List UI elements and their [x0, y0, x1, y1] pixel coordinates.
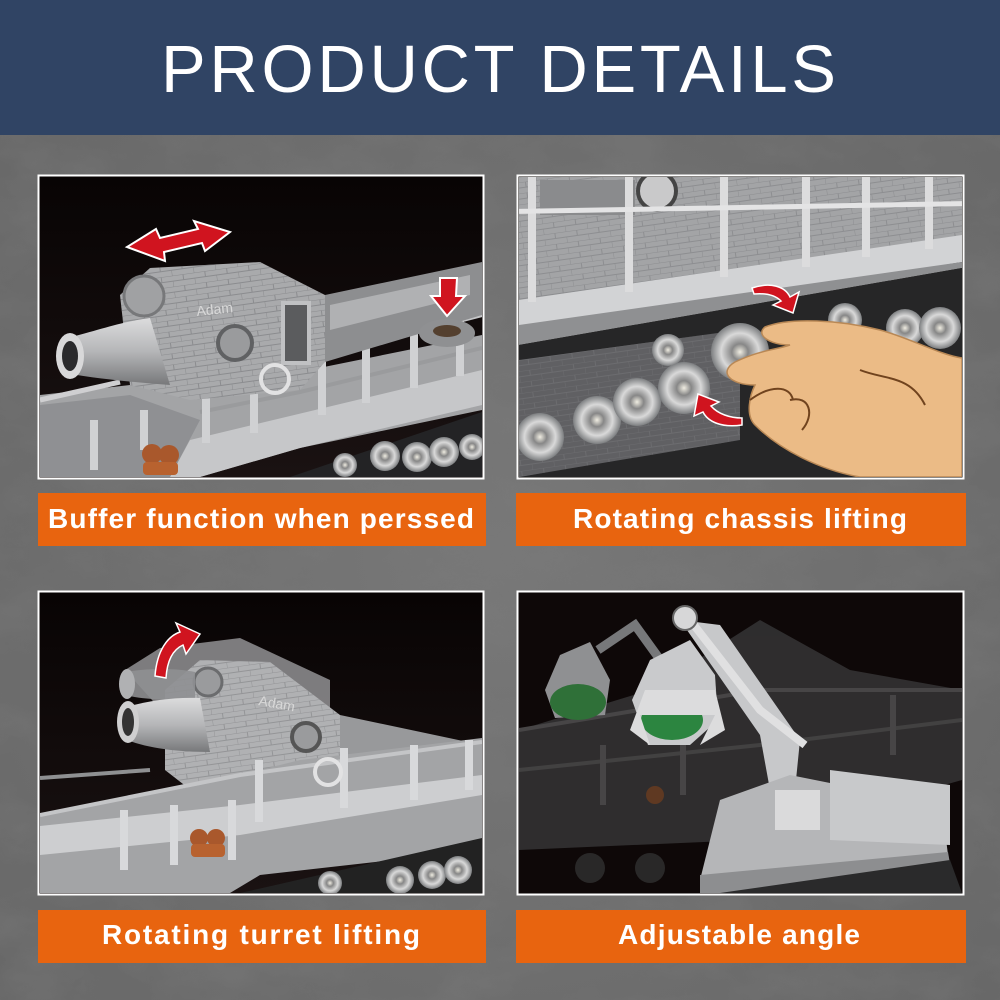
hand: [727, 321, 962, 477]
caption: turret: [38, 910, 486, 963]
dim background gun: [519, 620, 962, 883]
panel: turret: [38, 592, 484, 895]
rear crane claw: [545, 619, 662, 720]
panel: crane: [518, 592, 964, 894]
figures: [142, 444, 179, 475]
turret: Adam: [257, 692, 296, 714]
barrels: [117, 669, 210, 752]
caption: buffer: [38, 493, 486, 546]
caption: turret: Rotating turret lifting: [102, 919, 420, 950]
lower chassis: [519, 268, 962, 477]
caption: chassis: Rotating chassis lifting: [573, 503, 907, 534]
turret: Adam: [196, 299, 234, 319]
turret: [120, 262, 482, 400]
panel: buffer function: [38, 176, 485, 478]
panel: chassis: [516, 172, 964, 478]
header band: [0, 0, 1000, 135]
hand creases: [750, 370, 925, 430]
caption: angle: [516, 910, 966, 963]
figures: [190, 829, 225, 857]
ghost turret: [126, 638, 330, 708]
arrow: horizontal: [127, 221, 230, 261]
turret: [165, 660, 461, 788]
breech wheel: [261, 319, 475, 393]
upper deck: [519, 172, 962, 345]
tracks: [290, 412, 485, 477]
caption: chassis: [516, 493, 966, 546]
title: PRODUCT DETAILS: [161, 32, 836, 107]
caption: buffer: Buffer function when perssed: [48, 503, 474, 534]
wheels: [516, 303, 961, 461]
arrow: curved bottom: [694, 394, 742, 426]
deck and rails: [40, 738, 482, 893]
arrow: down: [431, 278, 465, 316]
crane vehicle: [700, 770, 962, 893]
arrow: rotate up: [155, 623, 200, 678]
gun barrel: [56, 318, 170, 385]
arrow: curved top: [752, 285, 799, 313]
front claw: [630, 640, 725, 745]
tracks: [240, 838, 482, 895]
crane arm: [673, 606, 805, 790]
deck and rails: [40, 315, 482, 477]
caption: angle: Adjustable angle: [618, 919, 860, 950]
